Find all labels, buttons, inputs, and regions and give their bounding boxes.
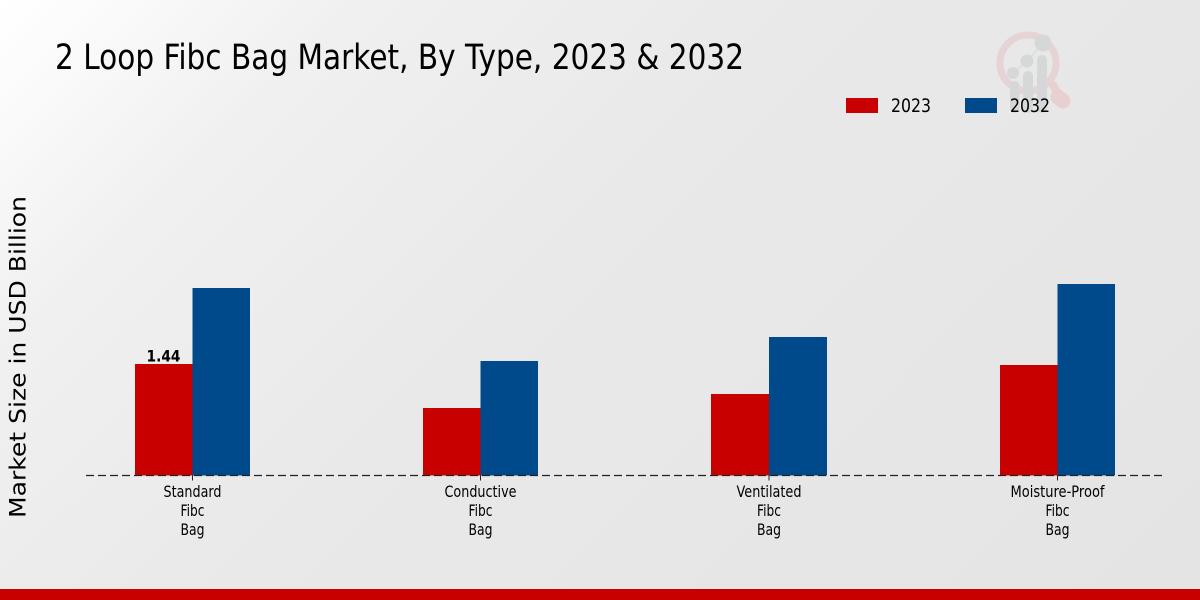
group: Moisture-Proof Fibc Bag: Bag	[1046, 520, 1070, 539]
group: Conductive Fibc Bag: Bag	[468, 520, 492, 539]
legend	[846, 95, 1050, 117]
y axis label: Market Size in USD Billion	[6, 196, 32, 518]
icon: logo watermark	[1000, 34, 1063, 113]
group: Standard Fibc Bag: 1.44	[146, 346, 180, 366]
legend: 2023: 2023	[891, 95, 931, 117]
group: Moisture-Proof Fibc Bag	[1000, 284, 1115, 539]
group: Conductive Fibc Bag: Conductive	[444, 482, 516, 501]
group: Ventilated Fibc Bag: Ventilated	[736, 482, 802, 501]
group: Ventilated Fibc Bag: Fibc	[757, 501, 781, 520]
group: Standard Fibc Bag: Fibc	[180, 501, 204, 520]
group: Moisture-Proof Fibc Bag: Moisture-Proof	[1010, 482, 1105, 501]
group: Conductive Fibc Bag	[423, 361, 538, 539]
group: Standard Fibc Bag: Bag	[180, 520, 204, 539]
title: 2 Loop Fibc Bag Market, By Type, 2023 & 2032	[55, 38, 744, 78]
x axis baseline	[86, 476, 1164, 480]
legend: 2023	[846, 95, 931, 117]
group: Ventilated Fibc Bag	[711, 337, 827, 539]
group: Standard Fibc Bag: Standard	[164, 482, 222, 501]
group: Ventilated Fibc Bag: Bag	[757, 520, 781, 539]
group: Conductive Fibc Bag: Fibc	[468, 501, 492, 520]
footer bar	[0, 589, 1200, 600]
bar chart	[135, 284, 1115, 539]
group: Moisture-Proof Fibc Bag: Fibc	[1046, 501, 1070, 520]
group: Standard Fibc Bag	[135, 288, 250, 539]
legend: 2032: 2032	[1010, 95, 1050, 117]
legend: 2032	[965, 95, 1050, 117]
